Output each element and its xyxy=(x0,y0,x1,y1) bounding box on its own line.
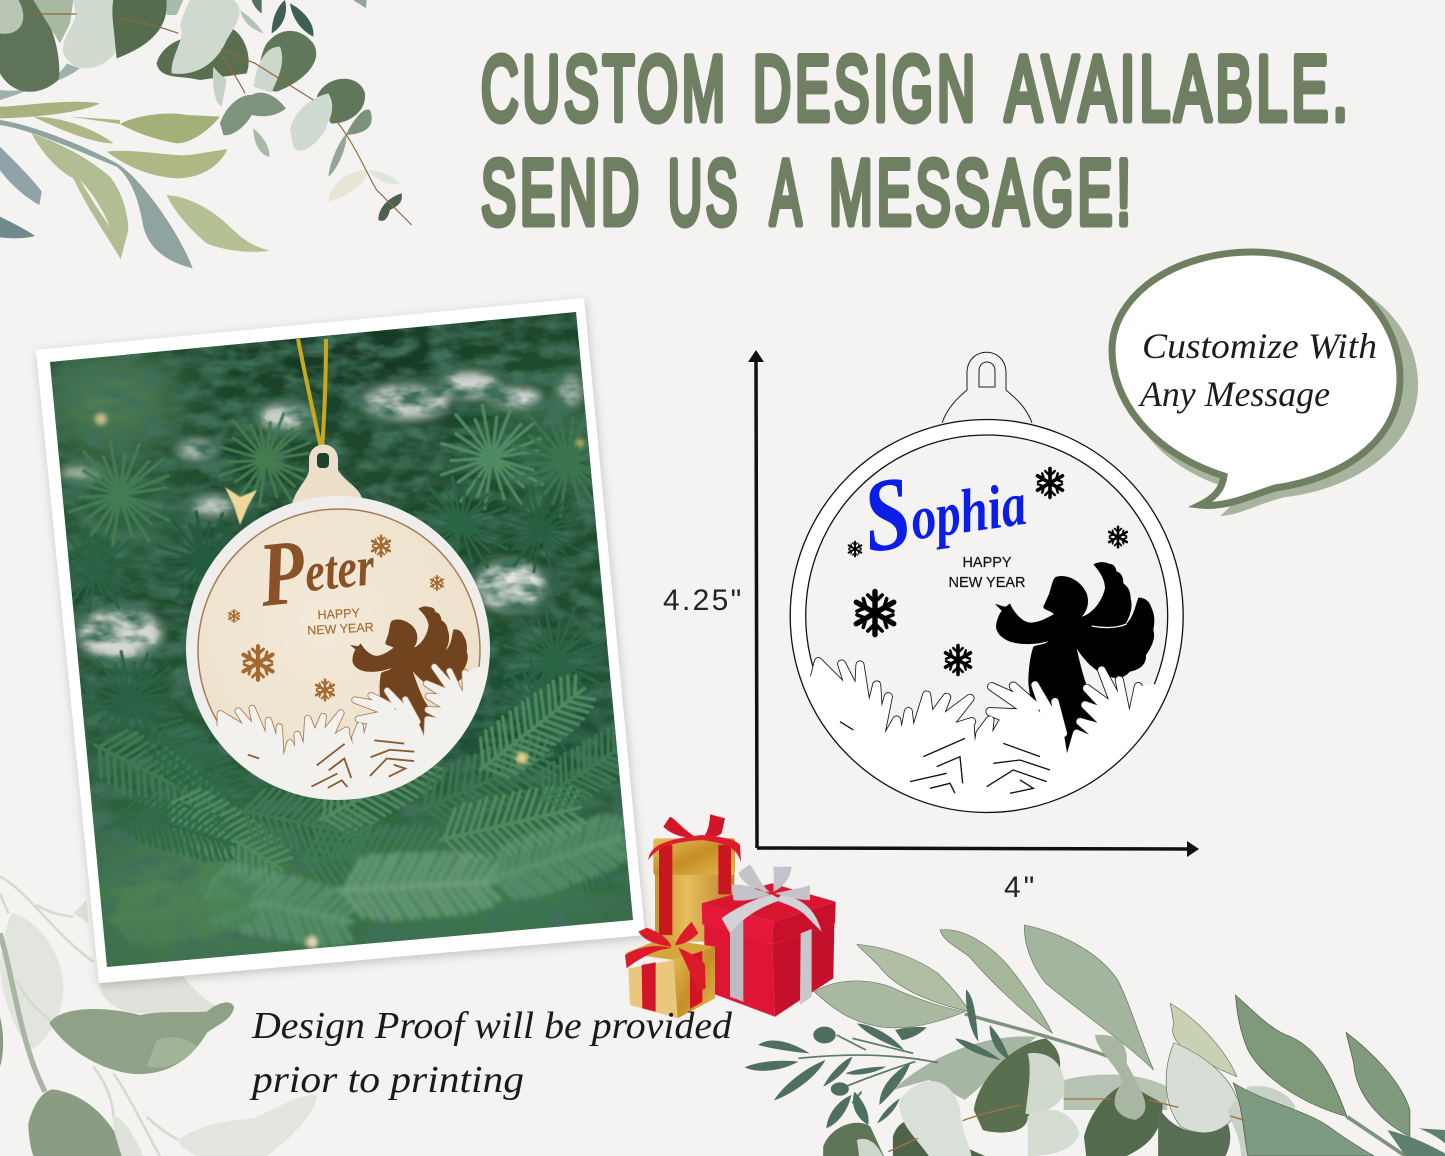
ornament name: eter xyxy=(302,534,378,603)
design proof note xyxy=(249,1005,733,1101)
ornament greeting xyxy=(306,605,374,638)
pine branches, lower tree xyxy=(93,673,620,892)
speech bubble xyxy=(1112,252,1418,516)
small gold gift xyxy=(625,922,715,1018)
design proof note: Design Proof will be provided xyxy=(251,1005,733,1047)
greeting: HAPPY xyxy=(962,554,1012,571)
ornament string xyxy=(298,339,326,448)
snowflakes xyxy=(849,469,1127,674)
title xyxy=(481,38,1352,244)
pine foliage xyxy=(810,657,1156,798)
wooden ornament xyxy=(186,444,490,800)
ornament pine foliage xyxy=(216,663,480,792)
white photo frame xyxy=(36,298,645,983)
title: DESIGN xyxy=(753,38,979,140)
ornament snowflakes xyxy=(229,536,443,700)
bubble text: Any Message xyxy=(1138,374,1330,414)
greeting xyxy=(948,554,1026,591)
title: CUSTOM xyxy=(481,38,729,140)
ornament angel xyxy=(347,602,479,770)
tree photograph xyxy=(50,312,633,967)
decoration: top-left leaves xyxy=(0,0,412,268)
title: US xyxy=(668,142,741,244)
bubble shadow xyxy=(1125,268,1418,516)
red gift xyxy=(702,864,836,1017)
ornament line drawing xyxy=(790,352,1184,814)
hanger tab xyxy=(942,352,1032,423)
ornament greeting: HAPPY xyxy=(317,606,361,622)
ornament rings xyxy=(790,420,1183,812)
pine sprigs, upper tree xyxy=(53,405,623,760)
title: MESSAGE! xyxy=(829,142,1135,244)
name: Sophia: ophia xyxy=(906,470,1030,554)
name: Sophia: S xyxy=(856,455,918,575)
width label: 4" xyxy=(1004,871,1037,904)
bubble text: Customize With xyxy=(1142,326,1377,366)
title: A xyxy=(770,142,805,244)
dimension arrows xyxy=(748,350,1199,857)
angel silhouette xyxy=(995,562,1154,777)
design proof note: prior to printing xyxy=(249,1059,524,1101)
decoration: bottom-left pale leaves xyxy=(0,877,317,1156)
ornament greeting: NEW YEAR xyxy=(307,620,374,638)
bubble text xyxy=(1138,326,1377,414)
title: SEND xyxy=(481,142,643,244)
gold cylinder gift xyxy=(648,814,741,942)
ornament name: P xyxy=(254,521,311,627)
photo panel: ornament on Christmas tree xyxy=(30,290,660,990)
height label: 4.25" xyxy=(663,584,744,617)
greeting: NEW YEAR xyxy=(948,574,1026,591)
bubble body xyxy=(1112,252,1400,505)
decoration: bottom-right leaves xyxy=(744,925,1445,1156)
gift boxes xyxy=(625,814,836,1018)
